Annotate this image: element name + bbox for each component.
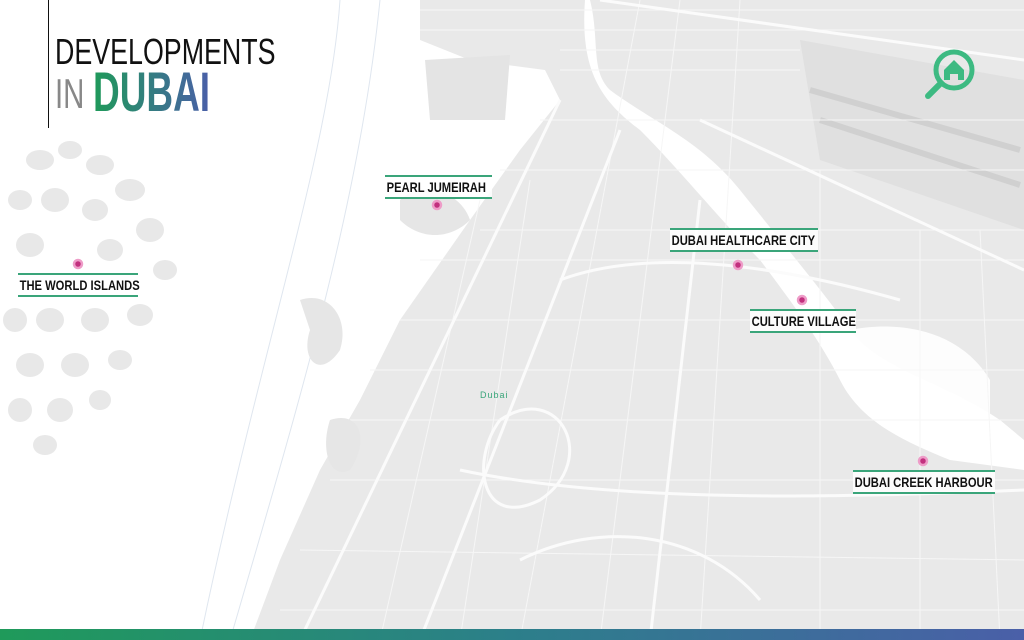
label: dubai creek harbour: DUBAI CREEK HARBOUR	[855, 474, 993, 490]
dots	[74, 201, 927, 465]
world islands	[3, 141, 177, 455]
label: world islands	[18, 273, 138, 297]
creek	[584, 0, 1024, 470]
title: DUBAI	[93, 60, 210, 123]
label: pearl jumeirah	[385, 175, 492, 199]
title: DEVELOPMENTS	[55, 31, 276, 72]
bottom gradient bar	[0, 629, 1024, 640]
label: dubai healthcare city: DUBAI HEALTHCARE CITY	[672, 232, 815, 248]
title	[48, 0, 289, 128]
icon: house search	[925, 50, 974, 99]
label: pearl jumeirah: PEARL JUMEIRAH	[387, 179, 486, 195]
label: culture village: CULTURE VILLAGE	[752, 313, 856, 329]
city block texture	[280, 0, 1024, 640]
maritime city	[425, 55, 510, 120]
label: dubai creek harbour	[853, 470, 995, 494]
palm fragments	[400, 190, 470, 235]
label: culture village	[750, 309, 856, 333]
map text: Dubai: Dubai	[480, 390, 509, 400]
label: world islands: THE WORLD ISLANDS	[20, 277, 140, 293]
roads	[300, 0, 1024, 640]
offshore curves	[200, 0, 340, 640]
airport	[800, 40, 1024, 230]
title: IN	[55, 70, 84, 117]
land mass	[250, 0, 1024, 640]
label: dubai healthcare city	[670, 228, 818, 252]
